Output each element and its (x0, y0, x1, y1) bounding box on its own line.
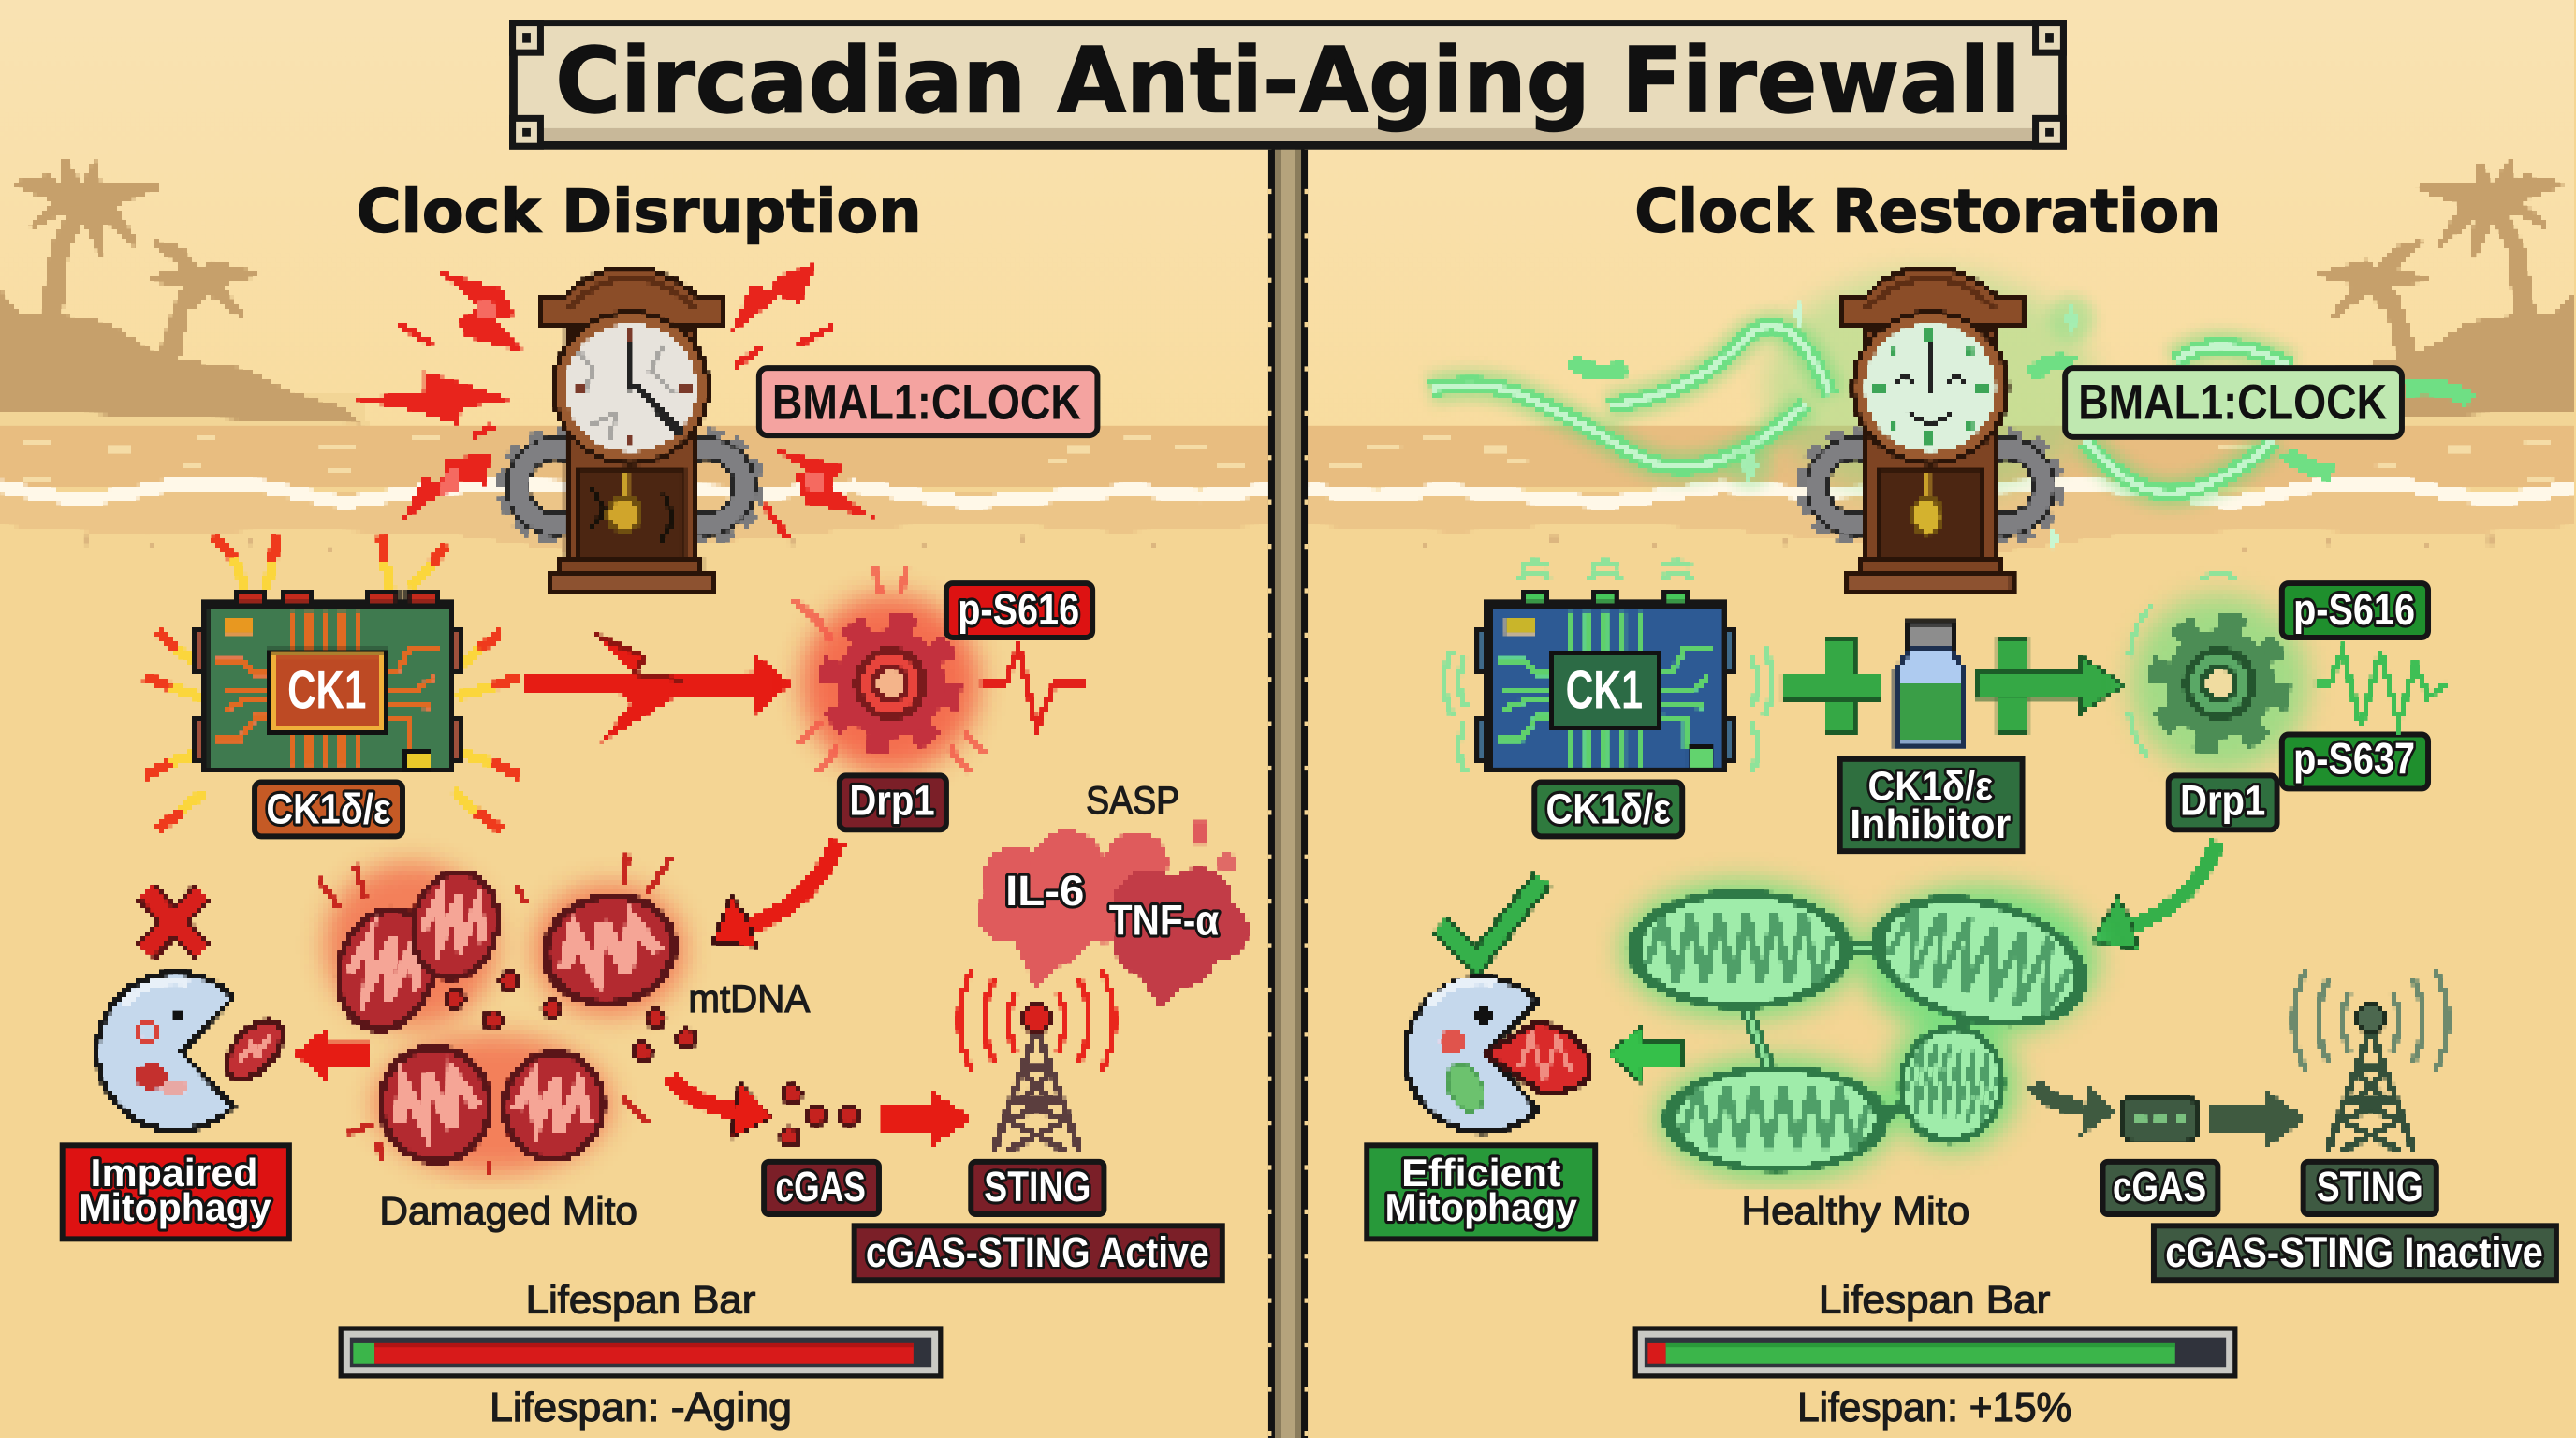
arrow: mito to cGAS, dim (2034, 1084, 2115, 1137)
label: CK1 inhibitor: Inhibitor (1850, 801, 2011, 847)
label: cGAS: cGAS (2113, 1163, 2206, 1211)
label: p-S616: p-S616 (2293, 585, 2415, 635)
arrow: cGAS to STING (882, 1091, 973, 1147)
label: BMAL1:CLOCK: BMAL1:CLOCK (772, 375, 1081, 431)
text: Lifespan: +15%: Lifespan: +15% (1797, 1385, 2071, 1431)
icon: SASP cytokine clouds (977, 822, 1249, 1007)
label: CK1 inhibitor: CK1δ/ε (1868, 764, 1993, 810)
arrow: mtDNA to cGAS (670, 1077, 772, 1138)
icon: healthy smiling grandfather clock (1802, 271, 2058, 594)
label: Efficient Mitophagy: Mitophagy (1385, 1185, 1577, 1229)
text: mtDNA: mtDNA (688, 976, 810, 1020)
label: CK1 inhibitor (1840, 759, 2023, 851)
text: Lifespan Bar: Lifespan Bar (526, 1277, 755, 1321)
arrow: to pac-man (1608, 1027, 1682, 1083)
icon: damaged mitochondria (318, 855, 685, 1173)
chart: regular signal wave (2315, 651, 2448, 726)
heading: Clock Disruption: Clock Disruption (357, 176, 922, 245)
text: Lifespan: -Aging: Lifespan: -Aging (490, 1385, 792, 1431)
icon: mtDNA fragments (446, 972, 858, 1146)
arrow: Drp1 to damaged mitochondria (713, 842, 838, 946)
bar: lifespan, mostly green (1633, 1326, 2237, 1379)
label: Efficient Mitophagy (1367, 1145, 1595, 1239)
icon: overheating CK1 chip (144, 536, 520, 829)
heading: Clock Restoration: Clock Restoration (1634, 176, 2221, 245)
text: TNF-alpha: TNF-α (1109, 897, 1219, 945)
chip text: CK1: CK1 (287, 660, 366, 720)
icon: Drp1 gear, balanced (2130, 574, 2317, 772)
text: Healthy Mito: Healthy Mito (1741, 1189, 1969, 1233)
panel: clock restoration (1367, 176, 2556, 1431)
icon: healthy mitochondria network (1621, 880, 2098, 1181)
label: CK1 delta epsilon: CK1δ/ε (266, 785, 391, 832)
label: STING: STING (2317, 1163, 2423, 1211)
icon: damaged grandfather clock (503, 271, 759, 594)
icon: check mark (1439, 879, 1543, 961)
icon: pac-man lysosome eating mitochondrion (1406, 977, 1590, 1132)
arrow: CK1 to Drp1 with lightning (526, 634, 792, 742)
center divider (1268, 144, 1308, 1438)
label: p-S637: p-S637 (2293, 735, 2415, 785)
title banner: Circadian Anti-Aging Firewall (555, 27, 2021, 133)
text: IL-6: IL-6 (1005, 867, 1084, 915)
label: CK1 delta epsilon: CK1δ/ε (1546, 785, 1671, 832)
panel: clock disruption (63, 176, 1249, 1431)
text: Lifespan Bar: Lifespan Bar (1819, 1277, 2050, 1321)
arrow: to pac-man (294, 1027, 370, 1083)
icon: lightning bolts around clock (353, 263, 874, 539)
icon: green energy waves and sparkles (1431, 271, 2471, 552)
label: cGAS: cGAS (775, 1163, 866, 1211)
label: STING: STING (984, 1163, 1090, 1211)
label: Efficient Mitophagy: Efficient (1401, 1151, 1560, 1195)
icon: inhibitor plus marks and arrow (1782, 639, 2124, 733)
text: SASP: SASP (1086, 778, 1179, 822)
arrow: Drp1 to healthy mitochondria (2093, 842, 2217, 949)
icon: inhibitor vial (1895, 623, 1965, 744)
label: p-S616: p-S616 (958, 585, 1079, 635)
chart: erratic signal trace (981, 648, 1084, 728)
label: Drp1: Drp1 (849, 777, 935, 825)
label: Impaired Mitophagy (63, 1145, 289, 1239)
icon: calm CK1 chip (1444, 562, 1773, 772)
icon: stalled pac-man lysosome (97, 973, 233, 1131)
icon: damaged mitochondrion being approached (217, 1011, 292, 1089)
label: Drp1: Drp1 (2180, 777, 2265, 825)
label: cGAS-STING Active: cGAS-STING Active (866, 1228, 1209, 1276)
label: Impaired Mitophagy: Impaired (91, 1151, 258, 1195)
icon: active STING tower (959, 970, 1114, 1151)
icon: quiet STING tower (2293, 970, 2448, 1151)
bar: lifespan, mostly red (339, 1326, 943, 1379)
icon: red X (146, 892, 202, 951)
arrow: cGAS to STING, dim (2210, 1091, 2306, 1147)
label: BMAL1:CLOCK: BMAL1:CLOCK (2078, 375, 2387, 431)
icon: Drp1 gear, fragmenting (794, 567, 986, 772)
text: Damaged Mito: Damaged Mito (379, 1189, 637, 1233)
icon: inactive cGAS pill (2121, 1097, 2198, 1142)
label: Impaired Mitophagy: Mitophagy (79, 1185, 271, 1229)
chip text: CK1: CK1 (1566, 660, 1643, 720)
